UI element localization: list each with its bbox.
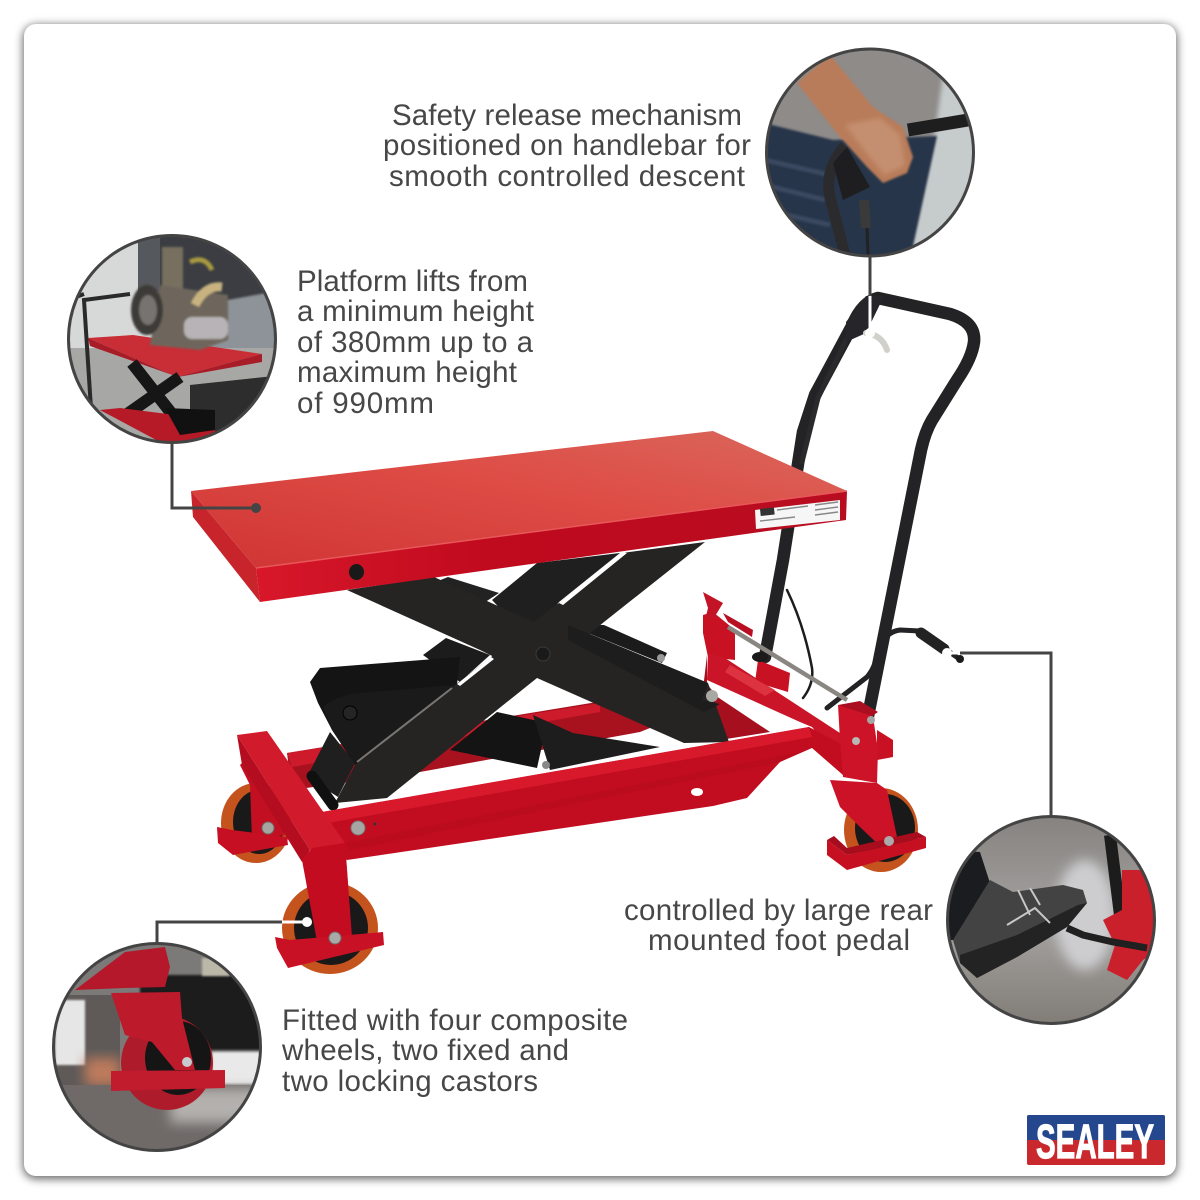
left background (50, 995, 120, 1085)
text: foot pedal (624, 894, 933, 957)
text: safety release: Safety release mechanism (392, 99, 742, 132)
arm and hand (797, 55, 913, 183)
floor reflection (1055, 860, 1115, 970)
tube (829, 146, 845, 255)
text: wheels: two locking castors (282, 1065, 538, 1098)
back left castor (217, 760, 291, 863)
workshop dark background (158, 237, 264, 302)
table in photo (88, 335, 262, 377)
circle outline: castor (54, 944, 260, 1150)
back scissor arm upper (428, 577, 499, 612)
text: safety release: smooth controlled descent (389, 160, 745, 193)
car (208, 292, 274, 348)
link rod (728, 627, 847, 700)
circle outline: foot pedal (948, 816, 1154, 1024)
photo circle: platform with engine (70, 237, 274, 441)
text: platform height: a minimum height (297, 295, 534, 328)
text: platform height: of 990mm (297, 387, 434, 420)
text: wheels (281, 1004, 628, 1098)
engine (131, 247, 228, 350)
trolley handle (78, 292, 130, 404)
text: wheels: Fitted with four composite (282, 1004, 628, 1037)
text: foot pedal: mounted foot pedal (648, 924, 910, 957)
fork (111, 992, 195, 1070)
cable (864, 200, 866, 228)
platform hole (349, 564, 364, 580)
floor (62, 1085, 252, 1149)
rear cross beam (237, 731, 352, 947)
yoke beam (707, 653, 843, 765)
scissor in photo (124, 359, 184, 414)
text: platform height: of 380mm up to a (297, 326, 534, 359)
text: safety release: positioned on handlebar for (383, 129, 751, 162)
back connection (423, 638, 490, 682)
scissor mechanism (307, 542, 729, 805)
background right (912, 78, 972, 246)
callout line: castor (157, 917, 312, 944)
right bright (212, 1052, 267, 1084)
front left castor (275, 843, 384, 974)
dark background (140, 975, 265, 1050)
pedal arm (1067, 928, 1147, 948)
floor (70, 348, 274, 440)
red mount (75, 947, 170, 990)
main rail (322, 727, 843, 860)
release lever (866, 333, 887, 350)
front scissor arm (347, 577, 729, 743)
left post (703, 612, 735, 660)
photo circle: castor (55, 945, 259, 1149)
lift table product (191, 296, 974, 974)
wheel (121, 1016, 213, 1110)
rear yoke and blocks (700, 592, 893, 765)
text: foot pedal: controlled by large rear (624, 894, 933, 927)
red block (1103, 870, 1158, 980)
callout line: platform (172, 443, 261, 513)
front right post and castor (827, 701, 926, 872)
jeans (760, 122, 937, 260)
text: platform height: Platform lifts from (297, 265, 528, 298)
circle outline: platform with engine (68, 236, 276, 442)
handle frame (765, 296, 974, 716)
platform (191, 431, 847, 602)
foot pedal (827, 630, 958, 708)
release block (833, 147, 870, 200)
post (1110, 835, 1120, 915)
rear scissor arm (335, 542, 705, 803)
hydraulic cylinder (450, 712, 660, 770)
shoe (953, 880, 1087, 978)
handlebar (908, 120, 968, 130)
text: wheels: wheels, two fixed and (281, 1034, 569, 1067)
handle release plate (846, 296, 884, 342)
circle outline: safety release (766, 49, 974, 256)
callout line: foot pedal (942, 648, 1051, 817)
text: platform height: maximum height (297, 356, 517, 389)
text: platform height (297, 265, 534, 420)
photo circle: foot pedal (945, 815, 1160, 1030)
guard plate (111, 1070, 225, 1091)
text: safety release (383, 99, 751, 193)
rating plate (755, 500, 840, 529)
callout line: safety release (865, 256, 875, 338)
side plate (323, 685, 455, 763)
photo circle: safety release (768, 50, 972, 254)
roller arm (310, 657, 460, 765)
far rail (287, 684, 720, 808)
trousers (949, 852, 990, 940)
